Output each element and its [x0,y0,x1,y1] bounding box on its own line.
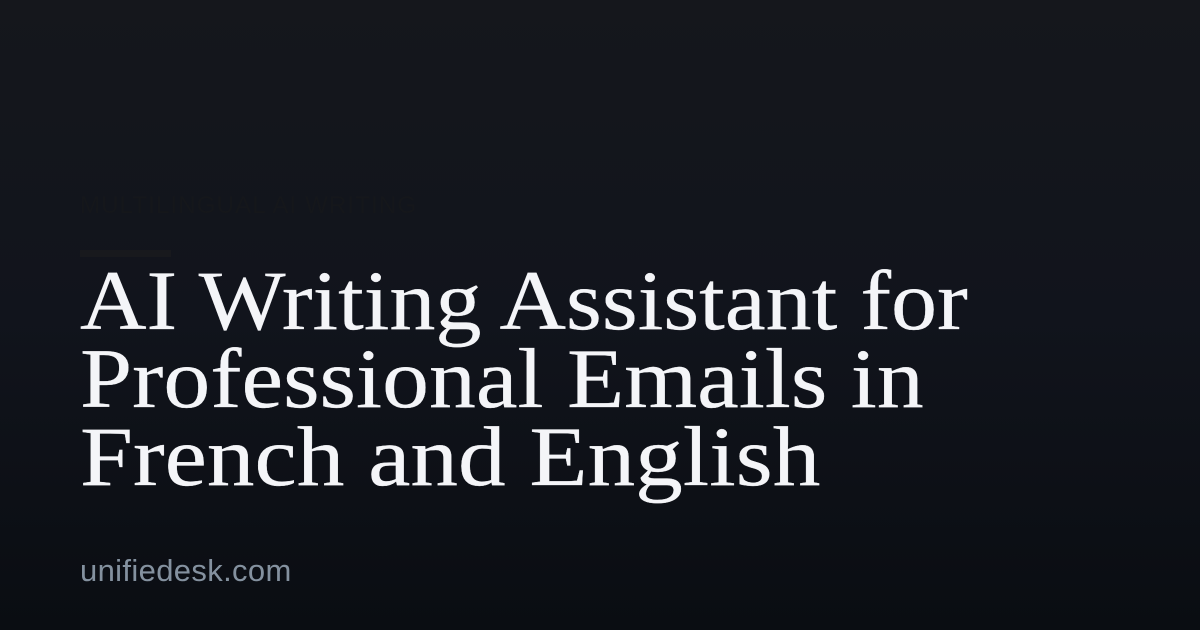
title: Professional Emails in [80,332,924,426]
title: AI Writing Assistant for [80,254,968,348]
domain: unifiedesk.com [80,553,292,588]
title: French and English [80,410,820,504]
eyebrow label: MULTILINGUAL AI WRITING [80,192,417,219]
title [80,254,968,504]
accent bar [80,250,171,257]
